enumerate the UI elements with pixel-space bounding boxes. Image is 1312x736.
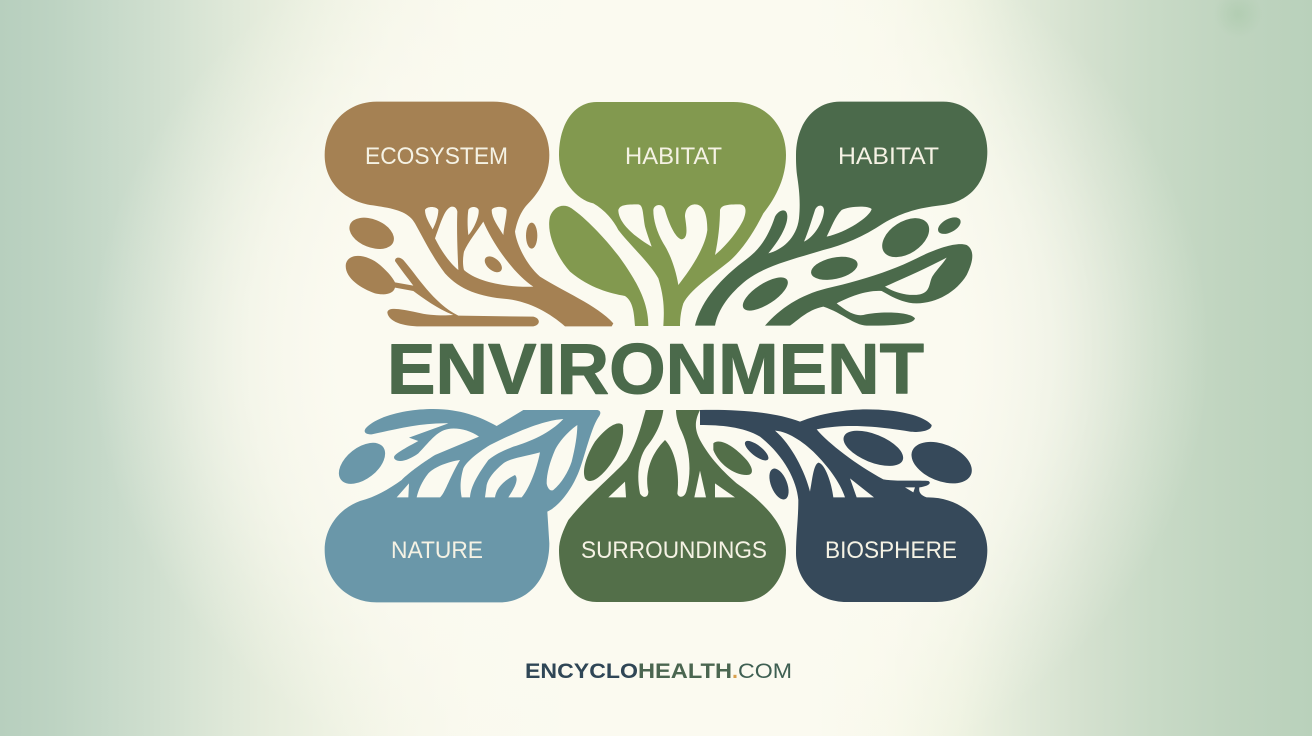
label: nature: NATURE [391,537,483,564]
footer url: ENCYCLO [525,659,638,683]
ecosystem tree shape [325,102,613,326]
nature tree shape [325,409,600,602]
label: ecosystem: ECOSYSTEM [365,143,508,170]
habitat green tree shape [549,102,786,326]
panel: habitat green [549,102,786,326]
panel: biosphere [700,409,987,602]
panel: surroundings [559,410,786,602]
label: habitat: HABITAT [625,143,722,170]
label: biosphere: BIOSPHERE [825,537,957,564]
label: habitat dark: HABITAT [838,143,939,170]
habitat dark tree shape [695,102,987,326]
footer url: COM [738,659,792,683]
panel: nature [325,409,600,602]
label: surroundings: SURROUNDINGS [581,537,767,564]
footer url: HEALTH [638,659,732,683]
panel: habitat dark [695,102,987,326]
footer url: . [732,659,738,683]
surroundings tree shape [559,410,786,602]
biosphere tree shape [700,409,987,602]
panel: ecosystem [325,102,613,326]
title: ENVIRONMENT [387,330,924,410]
